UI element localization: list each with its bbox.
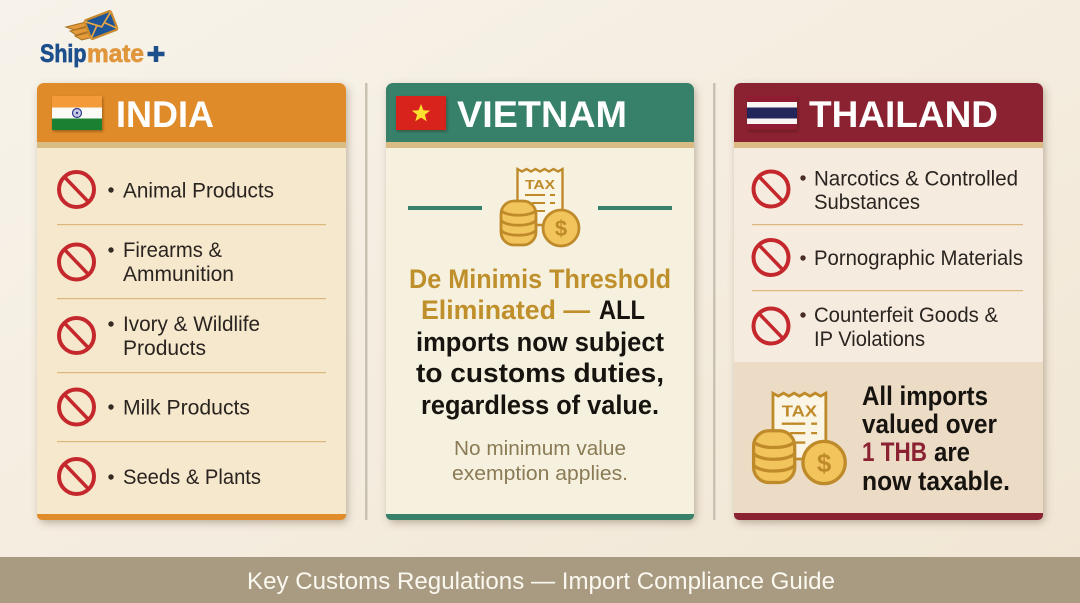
logo wordmark <box>40 40 164 68</box>
Thailand item: Pornographic Materials: Pornographic Materials <box>814 246 1023 270</box>
Vietnam headline: De Minimis Threshold <box>409 264 671 294</box>
Thailand callout text: All imports <box>862 381 988 411</box>
India card body <box>37 83 346 520</box>
Vietnam headline <box>409 264 671 420</box>
India bottom stripe <box>37 514 346 520</box>
Thailand item: Narcotics: Narcotics & Controlled <box>814 166 1018 190</box>
Thailand item: Counterfeit Goods: Counterfeit Goods & <box>814 303 998 327</box>
India item: Milk Products <box>59 390 250 424</box>
Vietnam headline: imports now subject <box>416 327 664 357</box>
India item: Ivory & Wildlife Products <box>59 312 260 360</box>
Thailand item: Counterfeit Goods <box>754 303 998 351</box>
footer banner <box>0 557 1080 603</box>
Thailand header stripe <box>734 142 1043 148</box>
icon: tax receipt and coins: TAX <box>525 177 555 192</box>
icon: tax receipt and coins <box>754 393 845 484</box>
panel: Thailand <box>734 83 1043 520</box>
Vietnam headline: to customs duties, <box>416 358 664 388</box>
India item: Milk Products: Milk Products <box>123 396 250 420</box>
Vietnam headline: regardless of value. <box>421 390 659 420</box>
Vietnam card body <box>386 83 694 520</box>
India item: Ivory & Wildlife Products: Ivory & Wildlife <box>123 312 260 336</box>
icon: tax receipt and coins: TAX <box>782 404 818 421</box>
divider: left <box>365 83 368 520</box>
Thailand heading: THAILAND <box>809 94 998 135</box>
logo wordmark: mate <box>87 40 144 68</box>
icon: tax receipt and coins: $ <box>555 216 567 241</box>
Thailand item: Pornographic Materials <box>754 240 1023 275</box>
Thailand card body <box>734 83 1043 520</box>
rule right <box>598 206 672 210</box>
flag: Thailand <box>747 96 797 130</box>
India header <box>37 83 346 142</box>
India item: Firearms & Ammunition <box>59 238 234 286</box>
icon: flying envelope <box>66 11 118 40</box>
panel: Vietnam <box>386 83 694 520</box>
India header stripe <box>37 142 346 148</box>
rule left <box>408 206 482 210</box>
Vietnam bottom stripe <box>386 514 694 520</box>
icon: tax receipt and coins: $ <box>817 450 831 478</box>
logo: Shipmate+ <box>40 11 164 68</box>
panel: India <box>37 83 346 520</box>
Thailand item: Narcotics: Substances <box>814 190 920 214</box>
India item: Seeds & Plants: Seeds & Plants <box>123 465 261 489</box>
India heading: INDIA <box>116 94 214 135</box>
India item: Firearms & Ammunition: Ammunition <box>123 262 234 286</box>
India item: Firearms & Ammunition: Firearms & <box>123 238 222 262</box>
Vietnam header <box>386 83 694 142</box>
Thailand callout text: now taxable. <box>862 466 1010 496</box>
Vietnam note <box>452 437 628 485</box>
Vietnam note: No minimum value <box>454 437 626 460</box>
Thailand callout text: valued over <box>862 409 997 439</box>
India item: Ivory & Wildlife Products: Products <box>123 336 206 360</box>
Vietnam header stripe <box>386 142 694 148</box>
Vietnam headline: Eliminated — <box>421 295 590 325</box>
Vietnam headline: ALL <box>599 295 645 325</box>
Thailand item: Narcotics <box>754 166 1018 214</box>
Thailand header <box>734 83 1043 142</box>
logo wordmark: Ship <box>40 40 86 68</box>
Vietnam note: exemption applies. <box>452 462 628 485</box>
India item: Animal Products: Animal Products <box>123 178 274 202</box>
flag: Vietnam <box>396 96 446 130</box>
Vietnam heading: VIETNAM <box>457 94 627 135</box>
India item: Animal Products <box>59 172 274 207</box>
divider: right <box>713 83 716 520</box>
India item: Seeds & Plants <box>59 459 261 494</box>
footer banner: Key Customs Regulations — Import Compliance Guide <box>247 568 835 595</box>
Thailand lower callout background <box>734 362 1043 514</box>
Thailand callout text: 1 THB <box>862 437 927 467</box>
Thailand item: Counterfeit Goods: IP Violations <box>814 327 925 351</box>
flag: India <box>52 96 102 130</box>
Thailand callout text: are <box>934 437 970 467</box>
Thailand bottom stripe <box>734 513 1043 520</box>
Thailand callout text <box>862 381 1010 496</box>
icon: tax receipt and coins <box>501 169 579 246</box>
